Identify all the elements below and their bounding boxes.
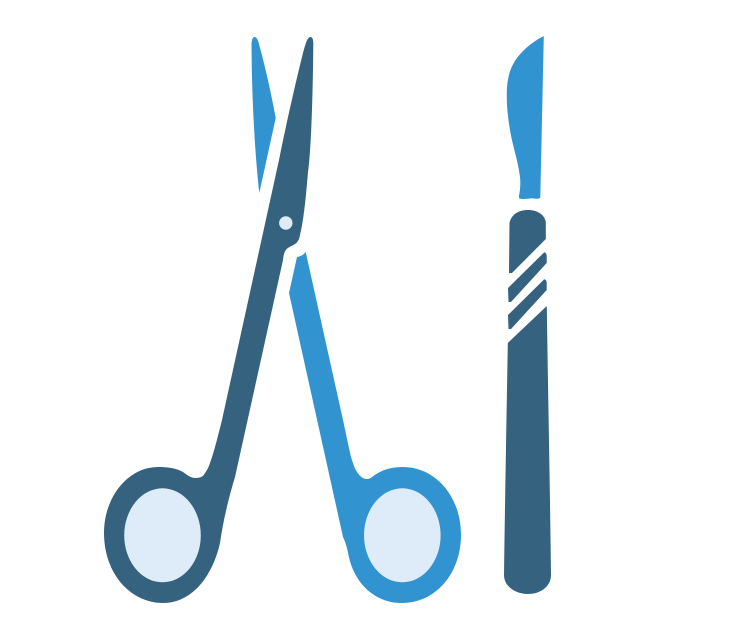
left finger hole [124, 488, 201, 582]
dark upper blade and lower arm with handle [104, 37, 313, 603]
light blue upper blade [252, 37, 276, 193]
scalpel handle body [504, 306, 551, 594]
icon: scalpel [504, 36, 551, 594]
scalpel handle top [509, 210, 546, 273]
right finger hole [364, 488, 441, 582]
scalpel handle grip band 1 [508, 252, 547, 302]
icon: scissors [104, 37, 461, 603]
light blue lower arm and handle [289, 252, 461, 603]
scalpel handle grip band 2 [508, 279, 547, 329]
scalpel blade [507, 36, 544, 199]
pivot screw [279, 216, 292, 230]
